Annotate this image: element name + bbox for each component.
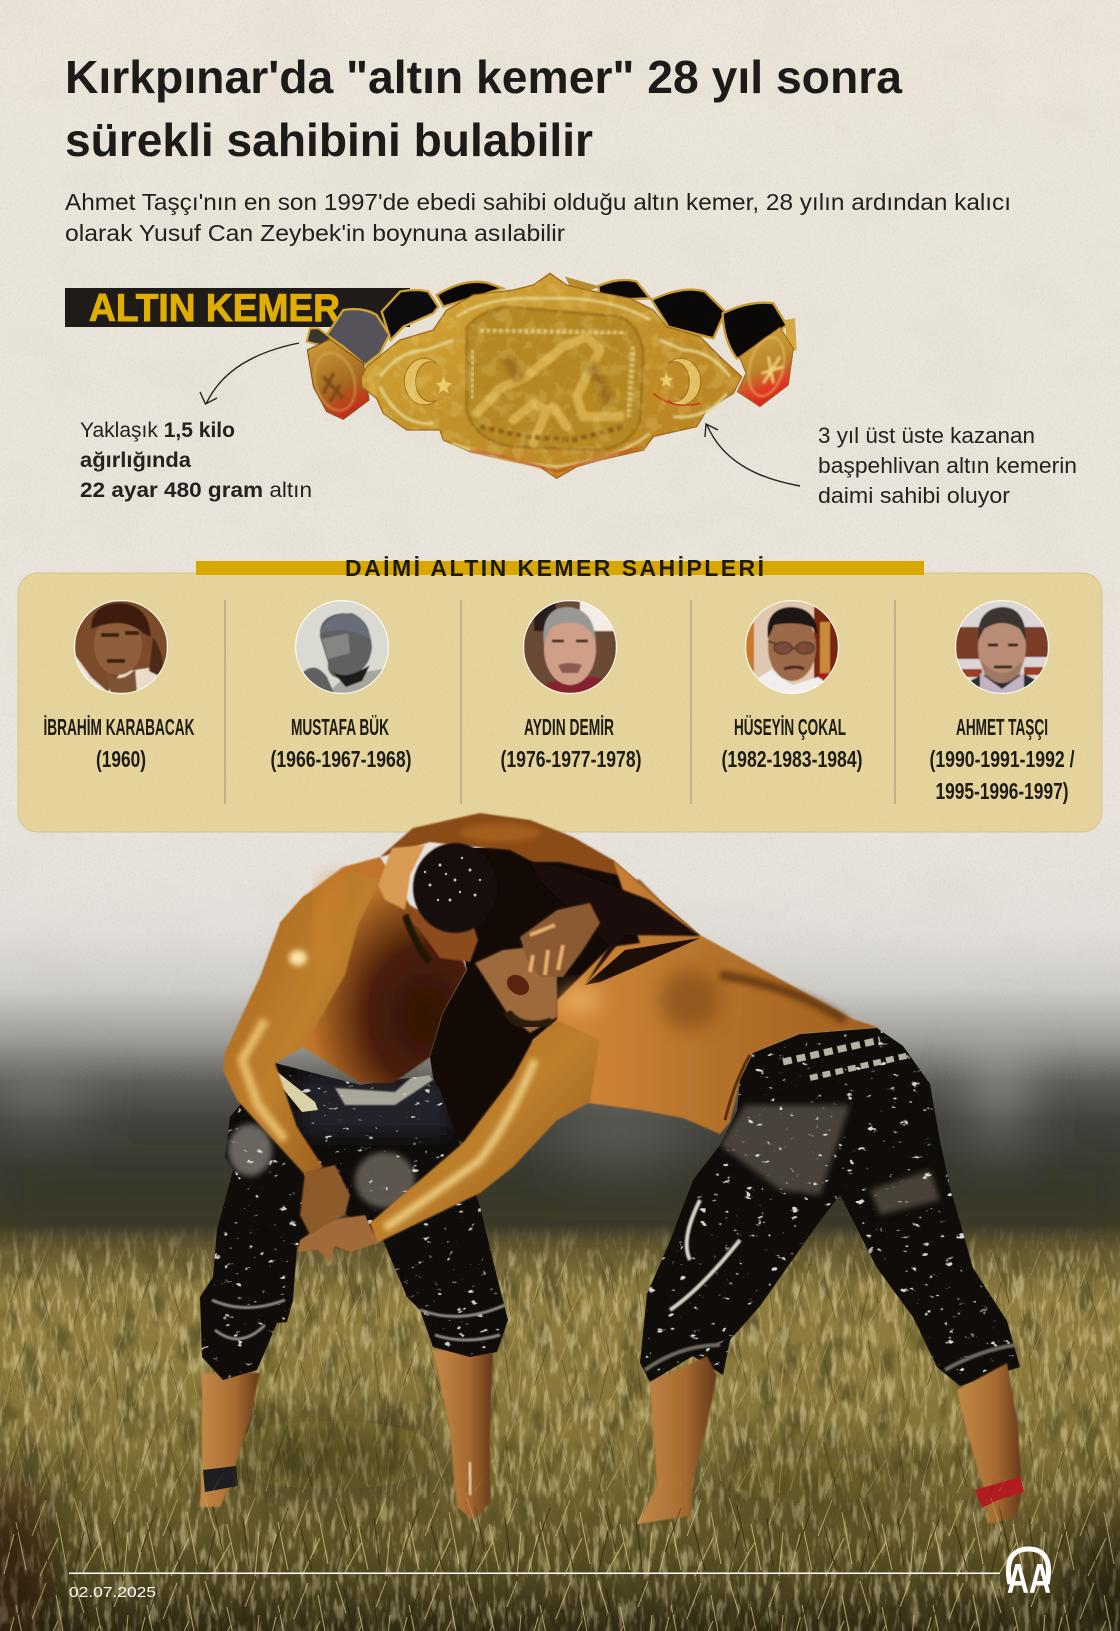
subtitle: Ahmet Taşçı'nın en son 1997'de ebedi sahibi olduğu altın kemer, 28 yılın ardından kalıcı bbox=[65, 189, 1011, 215]
ribbon: ALTIN KEMER: ALTIN KEMER bbox=[89, 287, 340, 330]
right wrestler head and hand bbox=[475, 903, 600, 1033]
left medallion bbox=[307, 339, 369, 419]
text: owner rule bbox=[818, 423, 1077, 508]
text: weight note: 22 ayar 480 gram altın bbox=[80, 479, 312, 502]
text: owner rule: 3 yıl üst üste kazanan bbox=[818, 423, 1035, 448]
title: sürekli sahibini bulabilir bbox=[65, 114, 593, 166]
central plaque bbox=[360, 270, 743, 480]
name: Hüseyin Çokal: (1982-1983-1984) bbox=[722, 746, 862, 772]
left wrestler torso bbox=[280, 857, 467, 1083]
name: Mustafa Bük: MUSTAFA BÜK bbox=[291, 714, 389, 740]
name: Aydın Demir bbox=[500, 714, 642, 772]
name: İbrahim Karabacak: (1960) bbox=[96, 746, 146, 772]
right wrestler front arm bbox=[298, 1020, 600, 1262]
name: İbrahim Karabacak: İBRAHİM KARABACAK bbox=[44, 714, 195, 740]
left wrestler hand bbox=[300, 1165, 350, 1235]
name: İbrahim Karabacak bbox=[44, 714, 195, 772]
portrait: İbrahim Karabacak bbox=[74, 600, 168, 694]
text: owner rule: daimi sahibi oluyor bbox=[818, 483, 1011, 508]
left wrestler head bbox=[405, 843, 497, 962]
name: Mustafa Bük: (1966-1967-1968) bbox=[270, 746, 412, 772]
panel: permanent belt owners bbox=[18, 573, 1102, 832]
name: Ahmet Taşçı: (1990-1991-1992 / bbox=[930, 746, 1075, 772]
subtitle: olarak Yusuf Can Zeybek'in boynuna asılabilir bbox=[65, 220, 565, 246]
name: Aydın Demir: AYDIN DEMİR bbox=[524, 714, 614, 740]
title: Kırkpınar'da "altın kemer" 28 yıl sonra bbox=[65, 51, 902, 103]
arrow: weight note bbox=[200, 343, 299, 404]
name: Mustafa Bük bbox=[270, 714, 412, 772]
name: Ahmet Taşçı bbox=[930, 714, 1075, 804]
portrait: Hüseyin Çokal bbox=[745, 600, 839, 694]
right medallion bbox=[737, 327, 793, 407]
right wrestler trousers bbox=[640, 1028, 1020, 1386]
text: weight note bbox=[80, 419, 312, 502]
name: Aydın Demir: (1976-1977-1978) bbox=[500, 746, 642, 772]
subtitle bbox=[65, 189, 1011, 246]
right wrestler torso bbox=[530, 860, 880, 1134]
logo: Anadolu Agency bbox=[1007, 1549, 1051, 1602]
foreground grass over feet bbox=[0, 1470, 1120, 1631]
heading bar bbox=[196, 555, 924, 581]
text: weight note: ağırlığında bbox=[80, 449, 191, 472]
golden belt bbox=[307, 270, 797, 480]
portrait: Ahmet Taşçı bbox=[955, 600, 1049, 694]
portrait: Mustafa Bük bbox=[295, 600, 389, 694]
footer rule bbox=[69, 1572, 1000, 1574]
date: 02.07.2025 bbox=[69, 1585, 156, 1601]
name: Ahmet Taşçı: AHMET TAŞÇI bbox=[956, 714, 1048, 740]
text: weight note: Yaklaşık 1,5 kilo bbox=[80, 419, 235, 442]
name: Ahmet Taşçı: 1995-1996-1997) bbox=[936, 778, 1068, 804]
heading bar: DAİMİ ALTIN KEMER SAHİPLERİ bbox=[345, 555, 764, 581]
name: Hüseyin Çokal: HÜSEYİN ÇOKAL bbox=[734, 714, 846, 740]
dark figure shadow bbox=[430, 845, 700, 1150]
wrestlers photo illustration bbox=[195, 813, 1030, 1524]
title bbox=[65, 51, 902, 166]
left wrestler legs bbox=[200, 1350, 493, 1520]
arrow: owner rule bbox=[705, 424, 800, 486]
name: Hüseyin Çokal bbox=[722, 714, 862, 772]
left wrestler arm bbox=[223, 870, 380, 1177]
left wrestler trousers bbox=[195, 1060, 515, 1390]
portrait: Aydın Demir bbox=[523, 600, 617, 694]
logo: Anadolu Agency: AA bbox=[1007, 1555, 1051, 1602]
text: owner rule: başpehlivan altın kemerin bbox=[818, 453, 1077, 478]
right wrestler legs bbox=[637, 1356, 1024, 1524]
top arm of right wrestler bbox=[378, 813, 665, 910]
